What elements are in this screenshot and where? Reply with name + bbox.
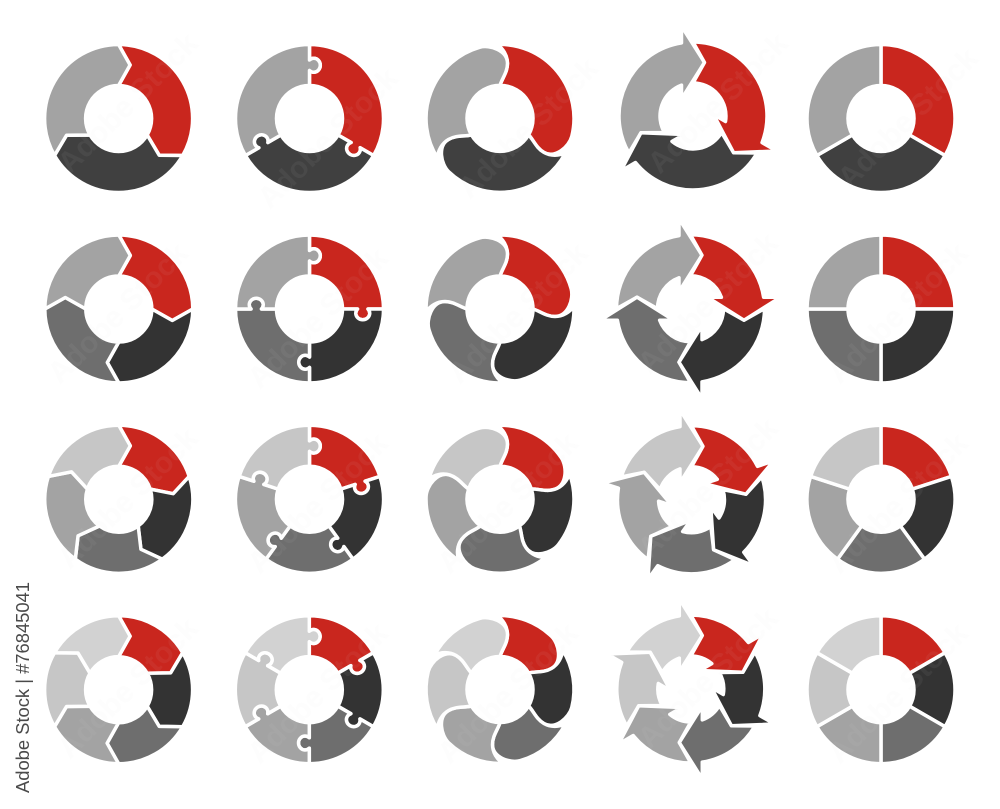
segment: mid gray <box>65 504 162 601</box>
segment: charcoal <box>507 473 590 558</box>
segment: red <box>119 235 193 320</box>
arrow: gray <box>619 706 691 763</box>
segment: mid gray <box>428 302 503 383</box>
segment: red <box>309 616 373 673</box>
segment: charcoal <box>881 309 955 383</box>
faint diagonal stock text overlay: Adobe Stock <box>432 427 585 580</box>
segment: red <box>881 425 951 489</box>
segment: gray <box>209 463 306 559</box>
segment: mid gray <box>236 298 310 383</box>
diagram: puzzle ring, 6 segments <box>213 597 405 782</box>
arrow: charcoal <box>705 652 791 743</box>
arrow: palest gray <box>627 589 712 681</box>
arrow: red <box>690 235 780 320</box>
diagram: arrow ring, 4 segments <box>600 219 780 399</box>
arrow: gray <box>616 219 702 309</box>
segment: mid gray <box>45 298 119 383</box>
segment: light gray <box>407 647 487 729</box>
segment: mid gray <box>101 698 183 782</box>
segment: gray <box>399 36 533 158</box>
faint diagonal stock text overlay: Adobe Stock <box>432 617 585 770</box>
faint diagonal stock text overlay: Adobe Stock <box>832 42 985 195</box>
segment: palest gray <box>55 597 136 681</box>
segment: gray <box>426 237 508 312</box>
arrow: light gray <box>591 635 676 726</box>
segment: charcoal <box>124 476 211 565</box>
segment: palest gray <box>817 597 899 681</box>
segment: light gray <box>785 642 867 727</box>
segment: mid gray <box>452 505 546 597</box>
segment: dark <box>240 100 374 220</box>
segment: dark <box>50 100 183 220</box>
segment: gray <box>807 235 881 309</box>
segment: gray <box>780 36 913 156</box>
diagram: puzzle ring, 4 segments <box>236 235 384 383</box>
segment: light gray <box>239 409 326 497</box>
faint diagonal stock text overlay: Adobe Stock <box>242 242 395 395</box>
segment: red <box>881 235 955 309</box>
arrow: red <box>691 615 763 672</box>
segment: gray <box>441 706 503 763</box>
segment: red <box>119 44 193 156</box>
segment: mid gray <box>807 309 881 383</box>
faint diagonal stock text overlay: Adobe Stock <box>822 237 975 390</box>
arrow: charcoal <box>679 309 764 399</box>
segment: light gray <box>22 642 104 727</box>
arrow: mid gray <box>669 697 755 789</box>
diagram: plain ring, 6 segments <box>785 597 977 782</box>
side credit text: Adobe Stock | #76845041 <box>13 582 33 793</box>
faint diagonal stock text overlay: Adobe Stock <box>52 612 205 765</box>
arrow: red <box>692 426 774 494</box>
faint diagonal stock text overlay: Adobe Stock <box>822 617 975 770</box>
segment: charcoal <box>513 650 593 732</box>
segment: dark <box>432 98 566 219</box>
segment: red <box>119 616 183 673</box>
segment: gray <box>208 36 342 156</box>
segment: red <box>497 425 565 490</box>
segment: red <box>119 425 189 494</box>
segment: gray <box>236 235 320 309</box>
segment: light gray <box>811 409 893 496</box>
segment: charcoal <box>299 309 384 383</box>
segment: red <box>497 235 572 316</box>
diagram: puzzle ring, 5 segments <box>209 409 402 601</box>
segment: charcoal <box>323 653 405 737</box>
segment: mid gray <box>863 698 945 782</box>
segment: dark <box>812 100 945 220</box>
faint diagonal stock text overlay: Adobe Stock <box>822 427 975 580</box>
diagram: plain ring, 3 segments <box>780 36 955 220</box>
diagram: arrow ring, 5 segments <box>582 399 787 608</box>
diagram: puzzle ring, 3 segments <box>208 36 384 220</box>
segment: charcoal <box>891 476 973 563</box>
segment: charcoal <box>133 653 215 737</box>
segment: red <box>881 616 945 673</box>
faint diagonal stock text overlay: Adobe Stock <box>242 427 395 580</box>
segment: gray <box>45 235 130 309</box>
segment: light gray <box>213 642 295 727</box>
faint diagonal stock text overlay: Adobe Stock <box>642 27 795 180</box>
diagram: plain ring, 4 segments <box>807 235 955 383</box>
diagram: rounded ring, 4 segments <box>426 235 574 383</box>
segment: mid gray <box>485 695 566 777</box>
segment: red <box>881 44 955 156</box>
segment: palest gray <box>434 602 515 684</box>
diagram: chevron ring, 4 segments <box>45 235 193 383</box>
arrow: dark <box>619 98 757 225</box>
diagram: chevron ring, 3 segments <box>18 36 193 220</box>
segment: gray <box>245 706 309 764</box>
segment: gray <box>404 468 497 561</box>
diagram: chevron ring, 6 segments <box>22 597 215 782</box>
diagram: rounded ring, 5 segments <box>404 414 590 597</box>
arrow: gray <box>582 456 688 560</box>
segment: charcoal <box>107 309 193 383</box>
segment: mid gray <box>256 504 353 601</box>
segment: light gray <box>429 414 512 499</box>
diagram: rounded ring, 3 segments <box>399 36 574 219</box>
segment: red <box>310 425 380 493</box>
diagram: chevron ring, 5 segments <box>18 409 211 601</box>
segment: gray <box>18 462 116 559</box>
segment: red <box>310 44 384 156</box>
segment: red <box>310 235 384 320</box>
segment: charcoal <box>315 476 402 564</box>
diagram: arrow ring, 3 segments <box>587 25 777 225</box>
segment: light gray <box>48 409 135 498</box>
arrow: mid gray <box>628 504 735 608</box>
faint diagonal stock text overlay: Adobe Stock <box>242 617 395 770</box>
faint diagonal stock text overlay: Adobe Stock <box>52 422 205 575</box>
arrow: charcoal <box>697 477 787 576</box>
arrow: mid gray <box>600 297 690 383</box>
faint diagonal stock text overlay: Adobe Stock <box>632 412 785 565</box>
segment: gray <box>817 706 881 764</box>
segment: mid gray <box>291 698 373 782</box>
faint diagonal stock text overlay: Adobe Stock <box>52 27 205 180</box>
segment: mid gray <box>830 508 924 601</box>
segment: palest gray <box>245 597 327 682</box>
diagram: arrow ring, 6 segments <box>591 589 791 789</box>
faint diagonal stock text overlay: Adobe Stock <box>632 227 785 380</box>
arrow: gray <box>587 25 725 153</box>
segment: charcoal <box>492 306 574 381</box>
arrow: red <box>693 42 777 153</box>
diagram: plain ring, 5 segments <box>781 409 973 601</box>
segment: gray <box>18 36 151 156</box>
faint diagonal stock text overlay: Adobe Stock <box>442 237 595 390</box>
segment: red <box>497 44 574 154</box>
faint diagonal stock text overlay: Adobe Stock <box>632 602 785 755</box>
segment: red <box>497 616 559 673</box>
faint diagonal stock text overlay: Adobe Stock <box>252 62 405 215</box>
segment: charcoal <box>895 653 977 737</box>
arrow: light gray <box>621 399 712 498</box>
faint diagonal stock text overlay: Adobe Stock <box>42 237 195 390</box>
diagram: rounded ring, 6 segments <box>407 602 593 777</box>
faint diagonal stock text overlay: Adobe Stock <box>452 52 605 205</box>
segment: gray <box>781 466 875 559</box>
segment: gray <box>54 706 119 764</box>
